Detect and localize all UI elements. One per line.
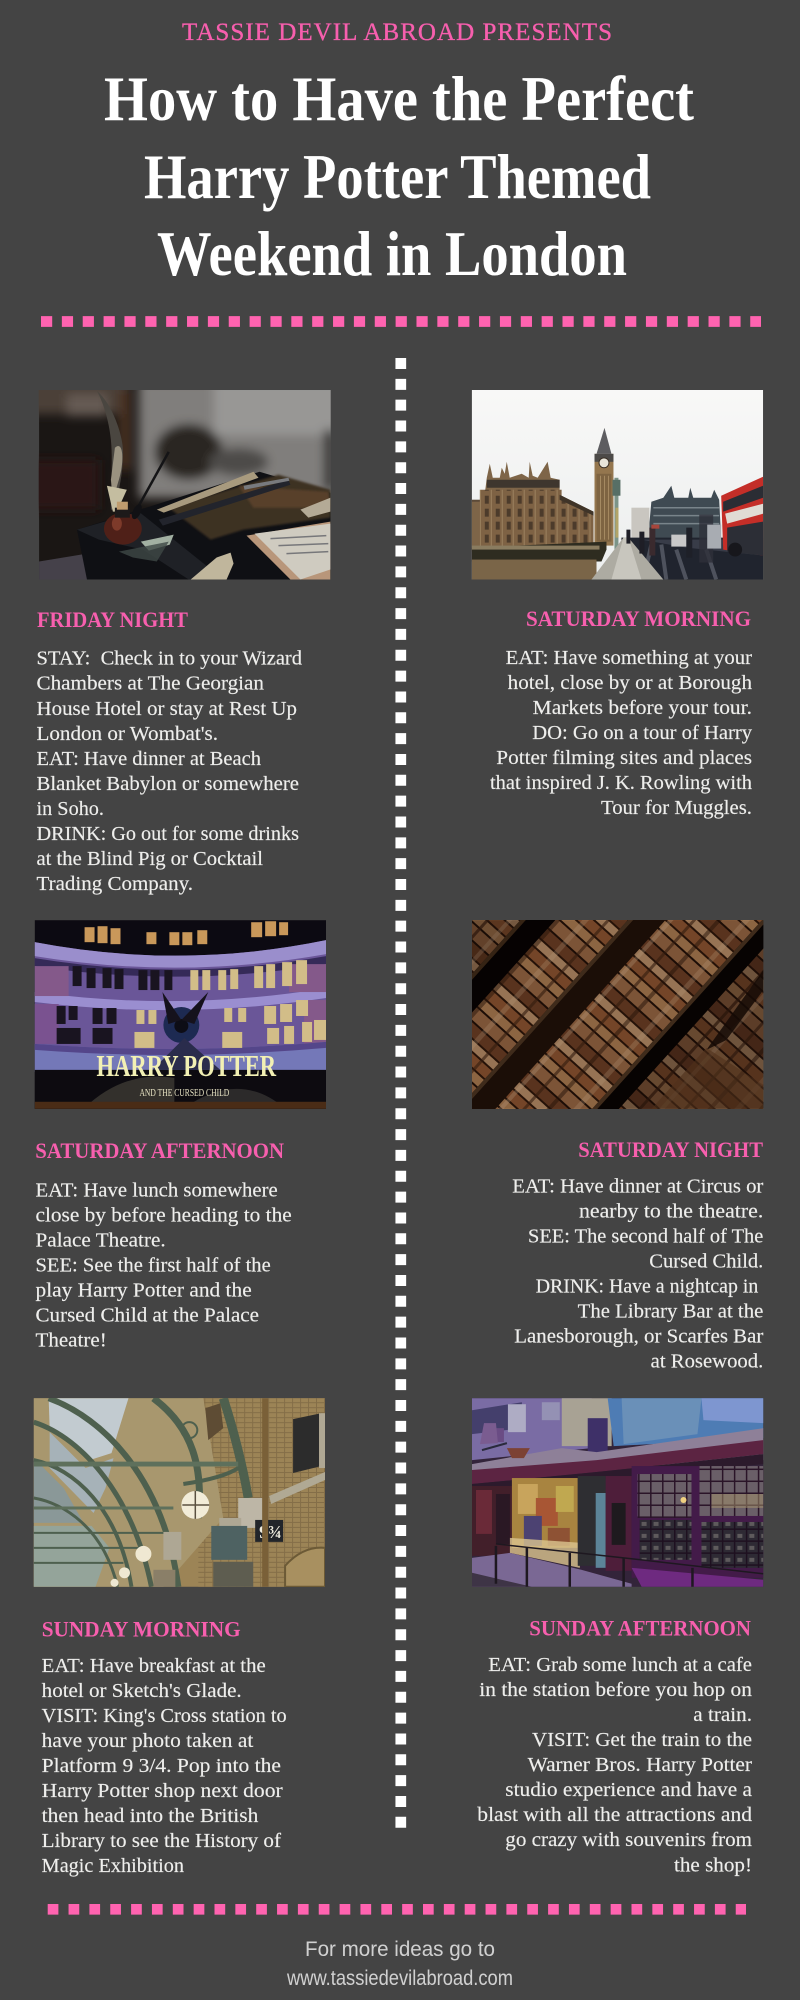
body text: friday night: Blanket Babylon or somewhere [36,773,299,795]
body text: friday night: at the Blind Pig or Cocktail [36,848,263,870]
body text: saturday afternoon [36,1180,292,1352]
panel: sunday morning [34,1398,325,1877]
body text: saturday afternoon: SEE: See the first half of the [36,1255,271,1277]
presenter line: TASSIE DEVIL ABROAD PRESENTS [182,19,612,46]
body text: saturday night: at Rosewood. [651,1351,763,1373]
body text: saturday night: EAT: Have dinner at Circus or [512,1176,764,1198]
body text: saturday night: DRINK: Have a nightcap in [536,1276,758,1298]
footer: more ideas link [286,1938,513,1990]
body text: sunday afternoon: go crazy with souvenirs from [505,1829,752,1851]
body text: friday night: in Soho. [36,798,104,820]
body text: sunday afternoon [477,1654,752,1877]
body text: friday night [36,648,302,895]
body text: friday night: EAT: Have dinner at Beach [36,748,261,770]
body text: saturday afternoon: play Harry Potter and the [36,1280,252,1302]
body text: saturday morning: hotel, close by or at Borough [508,672,752,694]
panel: sunday afternoon [472,1398,763,1877]
heading: saturday morning: SATURDAY MORNING [526,606,751,631]
body text: saturday morning: Markets before your tour. [533,697,752,719]
body text: sunday morning [42,1655,287,1877]
body text: sunday morning: Library to see the History of [42,1830,281,1852]
body text: saturday night: SEE: The second half of The [528,1226,763,1248]
photo: Palace Theatre facade: AND THE CURSED CHILD [139,1088,229,1099]
body text: saturday afternoon: Palace Theatre. [36,1230,166,1252]
heading: saturday afternoon: SATURDAY AFTERNOON [35,1138,284,1163]
body text: saturday morning: EAT: Have something at your [506,647,752,669]
body text: sunday afternoon: EAT: Grab some lunch at a cafe [488,1654,752,1676]
body text: sunday afternoon: Warner Bros. Harry Potter [528,1754,752,1776]
heading: saturday night: SATURDAY NIGHT [578,1137,763,1162]
body text: sunday afternoon: VISIT: Get the train to the [532,1729,752,1751]
title: How to Have the Perfect [104,63,695,134]
body text: sunday afternoon: studio experience and have a [505,1779,752,1801]
heading: friday night: FRIDAY NIGHT [37,607,188,632]
footer: more ideas link: For more ideas go to [305,1938,495,1961]
panel: friday night [29,380,343,895]
title: Harry Potter Themed [144,141,651,212]
body text: sunday morning: EAT: Have breakfast at the [42,1655,266,1677]
photo: King's Cross Platform 9 3/4 [34,1398,325,1587]
photo: Palace Theatre facade [34,920,326,1109]
body text: saturday afternoon: close by before heading to the [36,1205,292,1227]
body text: sunday morning: Harry Potter shop next door [42,1780,283,1802]
body text: saturday afternoon: Theatre! [36,1330,107,1352]
body text: saturday night [512,1176,764,1373]
photo: Houses of Parliament and Big Ben [472,390,764,580]
photo: diagonal shelves of old books [472,920,764,1109]
photo: King's Cross Platform 9 3/4: 9¾ [259,1522,282,1542]
body text: sunday morning: Platform 9 3/4. Pop into the [42,1755,281,1777]
body text: saturday morning [490,647,752,819]
body text: saturday night: Cursed Child. [649,1251,763,1273]
panel: saturday night [358,750,800,1373]
body text: sunday afternoon: a train. [693,1704,752,1726]
body text: sunday afternoon: blast with all the attractions and [477,1804,752,1826]
photo: quill and inkwell on a desk [38,390,331,580]
body text: sunday morning: have your photo taken at [42,1730,254,1752]
body text: friday night: DRINK: Go out for some drinks [36,823,299,845]
body text: sunday morning: hotel or Sketch's Glade. [42,1680,242,1702]
footer: more ideas link: www.tassiedevilabroad.com [286,1967,513,1990]
body text: saturday afternoon: Cursed Child at the Palace [36,1305,259,1327]
body text: saturday morning: DO: Go on a tour of Harry [532,722,752,744]
body text: saturday night: The Library Bar at the [578,1301,763,1323]
panel: saturday morning [472,390,763,819]
body text: saturday afternoon: EAT: Have lunch somewhere [36,1180,278,1202]
body text: friday night: Trading Company. [36,873,193,895]
title [104,63,695,289]
photo: Diagon Alley shopfronts [472,1398,764,1587]
body text: saturday night: nearby to the theatre. [579,1201,763,1223]
body text: sunday afternoon: in the station before you hop on [479,1679,752,1701]
body text: friday night: Chambers at The Georgian [36,673,264,695]
panel: saturday afternoon [35,920,326,1352]
body text: saturday night: Lanesborough, or Scarfes Bar [514,1326,764,1348]
title: Weekend in London [157,218,627,289]
body text: sunday afternoon: the shop! [674,1855,752,1877]
body text: sunday morning: Magic Exhibition [42,1855,184,1877]
body text: saturday morning: that inspired J. K. Rowling with [490,772,752,794]
body text: saturday morning: Potter filming sites and places [496,747,752,769]
body text: friday night: London or Wombat's. [36,723,218,745]
body text: saturday morning: Tour for Muggles. [601,797,752,819]
body text: sunday morning: VISIT: King's Cross station to [42,1705,287,1727]
heading: sunday afternoon: SUNDAY AFTERNOON [529,1616,751,1640]
body text: friday night: House Hotel or stay at Rest Up [36,698,297,720]
body text: sunday morning: then head into the British [42,1805,258,1827]
body text: friday night: STAY: Check in to your Wizard [36,648,302,670]
heading: sunday morning: SUNDAY MORNING [42,1616,241,1642]
